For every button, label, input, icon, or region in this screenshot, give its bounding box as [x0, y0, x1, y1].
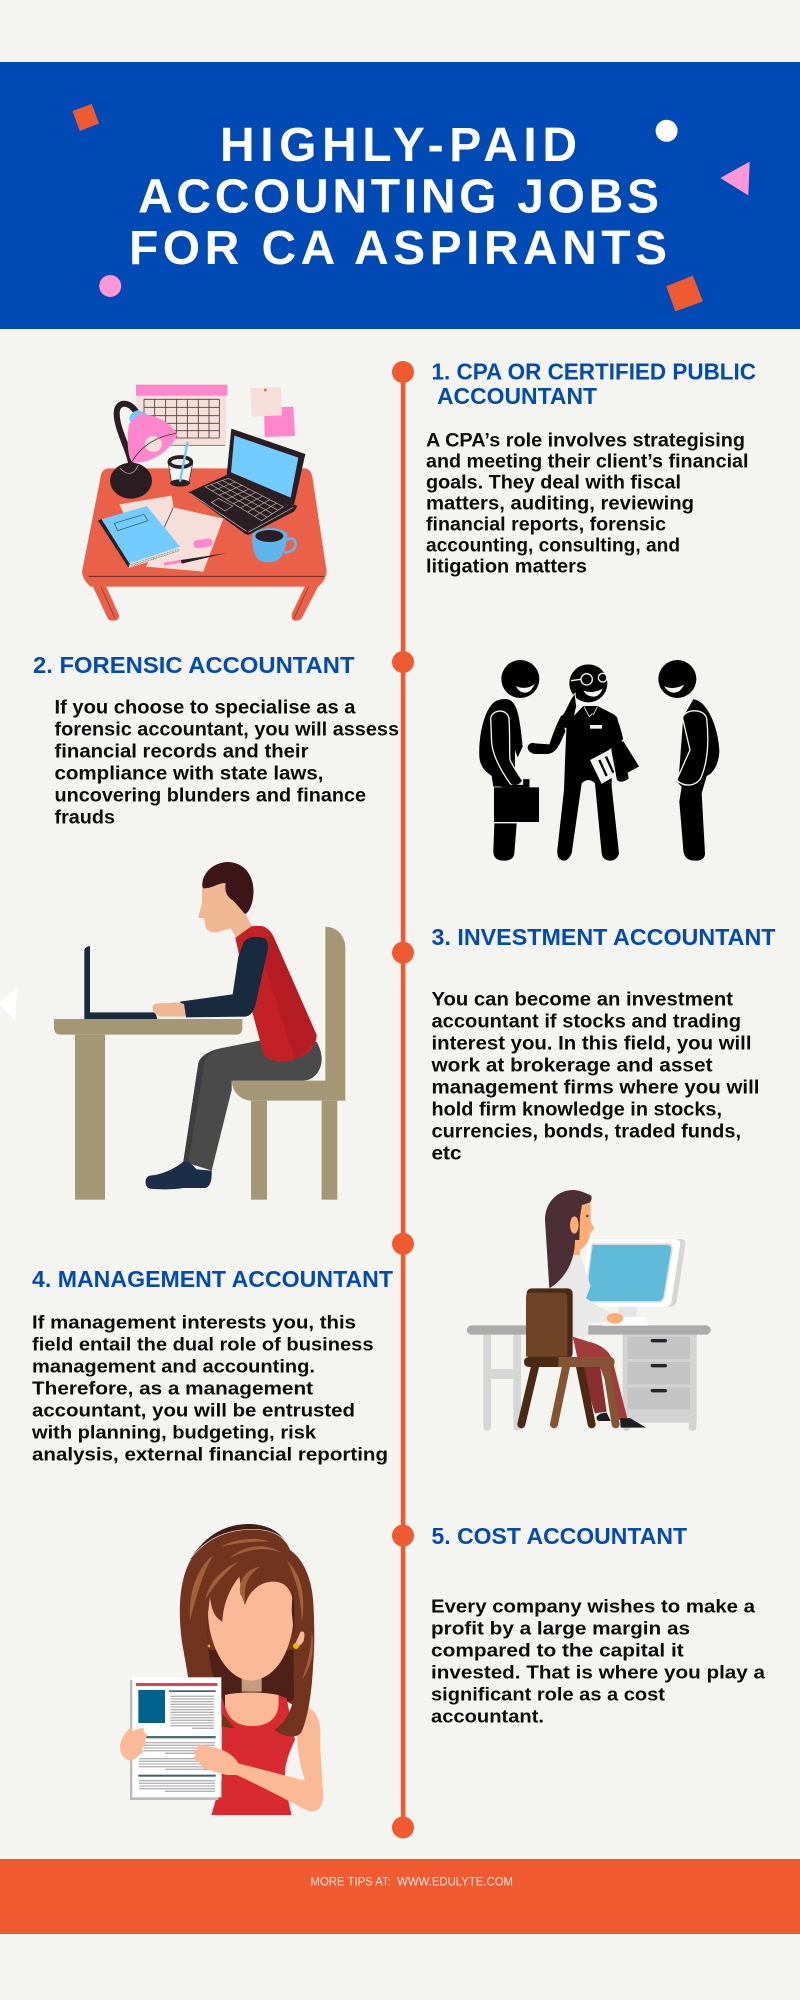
text block 4 [31, 1312, 388, 1464]
desk table [82, 468, 327, 621]
heading 1: ACCOUNTANT [437, 383, 598, 409]
title [129, 119, 667, 275]
heading 1: 1. CPA OR CERTIFIED PUBLIC [432, 358, 756, 384]
person right [658, 660, 719, 861]
text block 3: interest you. In this field, you will [432, 1034, 752, 1054]
heading 2: 2. FORENSIC ACCOUNTANT [33, 652, 355, 678]
arm [180, 937, 268, 1017]
illustration: three business people [479, 660, 719, 861]
title: ACCOUNTING JOBS [138, 170, 659, 224]
text block 5 [431, 1596, 766, 1726]
pen [164, 553, 227, 564]
red dress [211, 1695, 295, 1815]
chair [232, 927, 345, 1200]
text block 5: significant role as a cost [431, 1684, 665, 1704]
heading 4: 4. MANAGEMENT ACCOUNTANT [32, 1266, 394, 1292]
text block 2 [54, 698, 399, 828]
text block 2: financial records and their [54, 742, 309, 762]
text block 3: etc [432, 1144, 462, 1164]
woman seated [545, 1190, 646, 1428]
hair front locks over dress [222, 1643, 313, 1736]
text block 2: compliance with state laws, [54, 764, 324, 784]
text block 2: forensic accountant, you will assess [54, 720, 399, 740]
report document [130, 1677, 221, 1800]
hair back [180, 1524, 314, 1717]
title: HIGHLY-PAID [220, 119, 577, 172]
footer text: MORE TIPS AT: WWW.EDULYTE.COM [310, 1876, 513, 1888]
text block 2: uncovering blunders and finance [54, 786, 366, 806]
hand [153, 1002, 186, 1017]
illustration: man at laptop [0, 862, 345, 1200]
illustration: office desk [82, 385, 327, 621]
heading 3: 3. INVESTMENT ACCOUNTANT [432, 924, 776, 950]
text block 4: with planning, budgeting, risk [31, 1422, 317, 1442]
text block 5: invested. That is where you play a [431, 1662, 766, 1682]
heading 5: 5. COST ACCOUNTANT [432, 1523, 688, 1549]
trousers [183, 1041, 322, 1171]
hand right [194, 1744, 238, 1775]
hand left [120, 1727, 147, 1760]
drinking glass [168, 442, 193, 487]
hair highlights [190, 1539, 313, 1680]
text block 1 [426, 430, 748, 578]
text block 4: management and accounting. [32, 1356, 315, 1376]
arm right [237, 1707, 323, 1812]
illustration: woman at computer [467, 1190, 711, 1431]
sticky notes [250, 387, 295, 437]
text block 3: management firms where you will [432, 1078, 760, 1098]
text block 4: Therefore, as a management [32, 1378, 313, 1398]
text block 3: work at brokerage and asset [430, 1056, 713, 1076]
text block 1: A CPA’s role involves strategising [426, 430, 745, 452]
notebook [98, 506, 180, 568]
head and neck [198, 862, 254, 937]
timeline [392, 361, 414, 1838]
text block 4: field entail the dual role of business [32, 1334, 373, 1354]
text block 1: and meeting their client’s financial [426, 452, 748, 472]
decor: white dot [656, 120, 678, 142]
calendar [136, 385, 227, 445]
text block 5: Every company wishes to make a [431, 1596, 756, 1616]
white triangle marker [0, 988, 17, 1021]
decor: small orange square [72, 104, 99, 131]
text block 4: If management interests you, this [32, 1312, 356, 1332]
decor: pink triangle [720, 162, 750, 195]
text block 3: hold firm knowledge in stocks, [432, 1100, 722, 1120]
laptop side view [84, 946, 157, 1019]
table [54, 1019, 242, 1200]
coffee mug [252, 528, 296, 562]
text block 3: You can become an investment [432, 990, 734, 1010]
text block 2: frauds [54, 808, 115, 828]
laptop [188, 429, 305, 535]
text block 1: matters, auditing, reviewing [426, 494, 694, 514]
title: FOR CA ASPIRANTS [129, 222, 667, 275]
person middle with glasses and papers [528, 664, 640, 861]
text block 1: accounting, consulting, and [426, 536, 680, 556]
text block 5: accountant. [431, 1706, 544, 1726]
red vest [235, 926, 317, 1061]
illustration: woman holding report [120, 1524, 323, 1815]
text block 3: accountant if stocks and trading [432, 1012, 741, 1032]
footer band [0, 1859, 800, 1934]
text block 4: accountant, you will be entrusted [32, 1400, 355, 1420]
chair [521, 1288, 616, 1424]
text block 1: financial reports, forensic [426, 514, 666, 536]
text block 5: profit by a large margin as [431, 1618, 690, 1638]
eraser [193, 538, 213, 549]
text block 1: litigation matters [426, 556, 587, 578]
text block 3 [430, 990, 760, 1164]
computer monitor [580, 1239, 685, 1326]
chest and neck [225, 1678, 279, 1726]
papers [119, 496, 223, 572]
text block 1: goals. They deal with fiscal [426, 472, 681, 494]
text block 4: analysis, external financial reporting [32, 1444, 388, 1464]
text block 2: If you choose to specialise as a [54, 698, 356, 718]
heading 1 [432, 358, 756, 409]
text block 5: compared to the capital it [431, 1640, 684, 1660]
decor: large orange square [666, 276, 703, 311]
person left with briefcase [479, 660, 539, 861]
face [208, 1577, 305, 1681]
desk lamp [110, 404, 177, 499]
decor: pink dot [99, 275, 121, 297]
text block 3: currencies, bonds, traded funds, [432, 1122, 741, 1142]
shoe [145, 1162, 212, 1189]
header banner [0, 62, 800, 329]
office desk with drawers [467, 1325, 711, 1431]
